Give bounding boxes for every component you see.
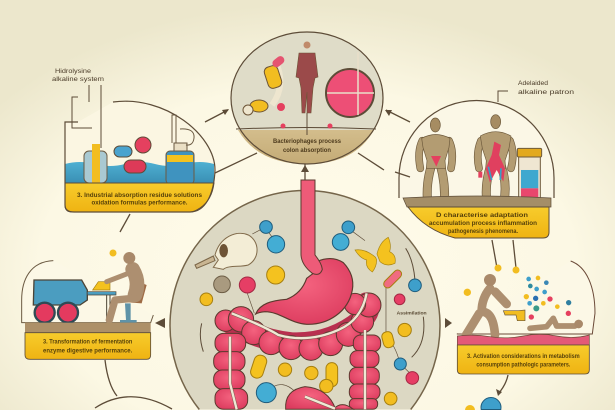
icon: standing person	[466, 274, 525, 335]
icon: table with gold load	[87, 282, 116, 322]
icon: human anatomy figure	[296, 42, 318, 135]
icon: skull	[195, 233, 257, 269]
yellow caption box: enzyme digestive performance.	[43, 348, 133, 355]
panel: treatment scene (lower right)	[457, 261, 595, 374]
sand ground	[238, 130, 374, 164]
panel: absorption system (left)	[65, 101, 215, 212]
icon: reclining person	[530, 318, 583, 328]
yellow caption box: 3. Transformation of fermentation	[43, 339, 132, 346]
icon: pills	[114, 137, 151, 173]
yellow caption box: oxidation formulas performance.	[92, 200, 188, 206]
caption	[273, 138, 341, 154]
icon: right bottle	[166, 115, 194, 184]
icon: specimen jar	[517, 148, 542, 198]
ground	[25, 323, 151, 333]
panel: machine operator (lower left)	[22, 252, 153, 359]
icon: athlete figure left	[419, 118, 452, 204]
panel: central digestive system	[170, 180, 440, 410]
yellow caption box: 3. Industrial absorption residue solutions	[77, 192, 202, 199]
yellow caption box	[457, 345, 589, 374]
yellow caption box: accumulation process inflammation	[429, 220, 537, 227]
arrows and connectors	[95, 110, 516, 409]
central label: Assimilation	[397, 310, 427, 316]
yellow caption box	[408, 207, 549, 238]
small pink dots	[280, 124, 332, 128]
connector dots	[110, 250, 520, 410]
panel outline	[399, 100, 554, 198]
caption: colon absorption	[283, 147, 331, 154]
ground	[403, 196, 551, 207]
label: right annotation: alkaline patron	[518, 89, 575, 96]
panel: human body (top)	[231, 32, 383, 164]
yellow caption box: 3. Activation considerations in metabolism	[467, 353, 580, 360]
label: left annotation: alkaline system	[52, 76, 104, 83]
icon: red gauge circle	[326, 52, 374, 117]
intestinal tube lines	[230, 293, 367, 409]
label: right annotation: Adelaided	[518, 80, 548, 87]
large intestine	[214, 293, 381, 409]
icon: butterfly	[355, 237, 395, 272]
caption: Bacteriophages process	[273, 138, 341, 145]
icon: athlete figure right	[478, 115, 513, 204]
arrowheads	[155, 109, 502, 396]
esophagus	[301, 180, 322, 274]
yellow caption box: pathogenesis phenomena.	[448, 228, 518, 235]
panel: adult bodies (right)	[399, 100, 554, 238]
label: left annotation: Hidrolysine	[55, 68, 91, 75]
icon: left bottle	[84, 144, 107, 183]
yellow caption box	[25, 333, 151, 359]
icon: articulated capsule chain	[243, 55, 286, 115]
panel outline	[65, 101, 215, 212]
label: right annotation	[498, 80, 575, 102]
molecules and pills	[200, 221, 424, 405]
yellow caption box: consumption pathologic parameters.	[476, 362, 571, 369]
stomach	[256, 259, 353, 324]
icon: blue cart	[33, 280, 87, 323]
pink tissue band	[457, 334, 589, 345]
label: left annotation	[52, 68, 104, 148]
particles	[464, 276, 571, 320]
panel outline	[231, 32, 383, 164]
yellow caption box	[65, 183, 214, 212]
icon: seated person	[107, 252, 147, 323]
water	[65, 162, 214, 183]
yellow caption box: D characterise adaptation	[436, 212, 528, 219]
